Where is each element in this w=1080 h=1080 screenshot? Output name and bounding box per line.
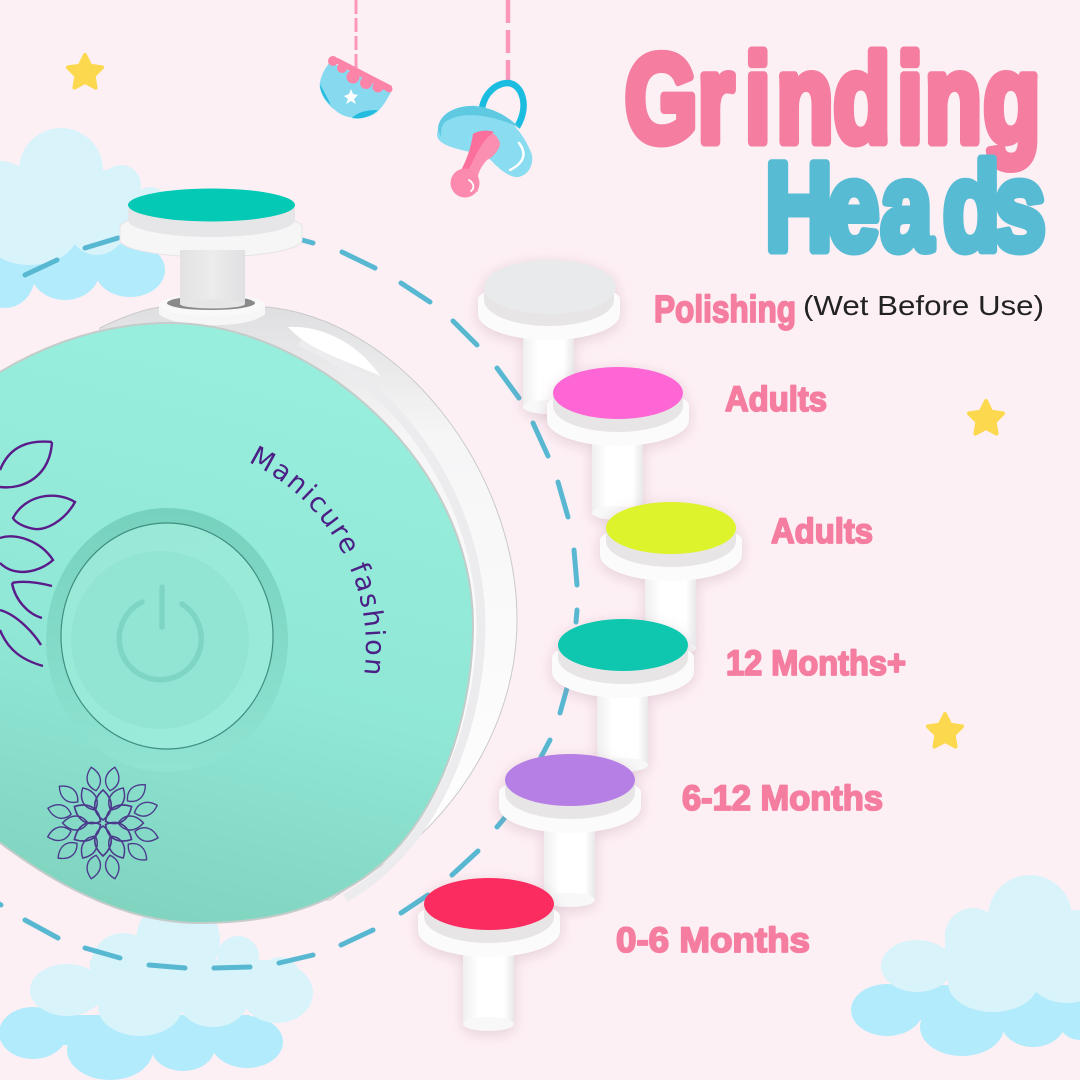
flower decoration bbox=[46, 766, 160, 880]
power icon bbox=[119, 587, 201, 680]
grinding head: pink adults bbox=[547, 367, 689, 520]
stars bbox=[68, 55, 1003, 747]
shell gloss bbox=[288, 327, 380, 376]
shell inner shading bbox=[300, 342, 481, 898]
device: nail trimmer bbox=[0, 188, 518, 924]
label: 12 Months+: 12 Months+ bbox=[726, 644, 906, 683]
hanging pacifier icon bbox=[437, 0, 532, 198]
leaf decoration bbox=[0, 442, 75, 666]
cloud: bottom centre bbox=[0, 898, 313, 1080]
collar bbox=[159, 250, 265, 325]
label: Adults yellow: Adults bbox=[771, 512, 873, 551]
white body shell bbox=[100, 307, 517, 900]
label: Polishing: Polishing bbox=[654, 289, 796, 331]
label: Adults pink: Adults bbox=[725, 380, 827, 419]
grinding head: purple 6-12 months bbox=[499, 754, 641, 907]
grinding head: yellow adults bbox=[600, 502, 742, 655]
title bbox=[625, 30, 1046, 277]
hanging diaper icon bbox=[320, 0, 392, 119]
cloud: top left bbox=[0, 128, 168, 308]
teal disc bbox=[0, 323, 473, 923]
grinding head: red 0-6 months bbox=[418, 878, 560, 1031]
cloud: bottom right bbox=[851, 875, 1080, 1056]
device text: Manicure fashion bbox=[250, 446, 386, 674]
power button bbox=[61, 523, 273, 749]
device top grinding head bbox=[120, 188, 302, 305]
title line: Grinding: Grinding bbox=[625, 30, 1041, 169]
label: Polishing: (Wet Before Use) bbox=[803, 290, 1044, 321]
title line: Heads: Heads bbox=[765, 138, 1046, 277]
grinding head: teal 12 months bbox=[552, 619, 694, 772]
label: 6-12 Months: 6-12 Months bbox=[682, 779, 883, 818]
grinding head: white polishing bbox=[478, 260, 620, 414]
label: 0-6 Months: 0-6 Months bbox=[616, 921, 810, 960]
button recess bbox=[46, 508, 288, 772]
label: Polishing bbox=[654, 289, 1044, 331]
dashed orbit arc bbox=[0, 238, 577, 968]
